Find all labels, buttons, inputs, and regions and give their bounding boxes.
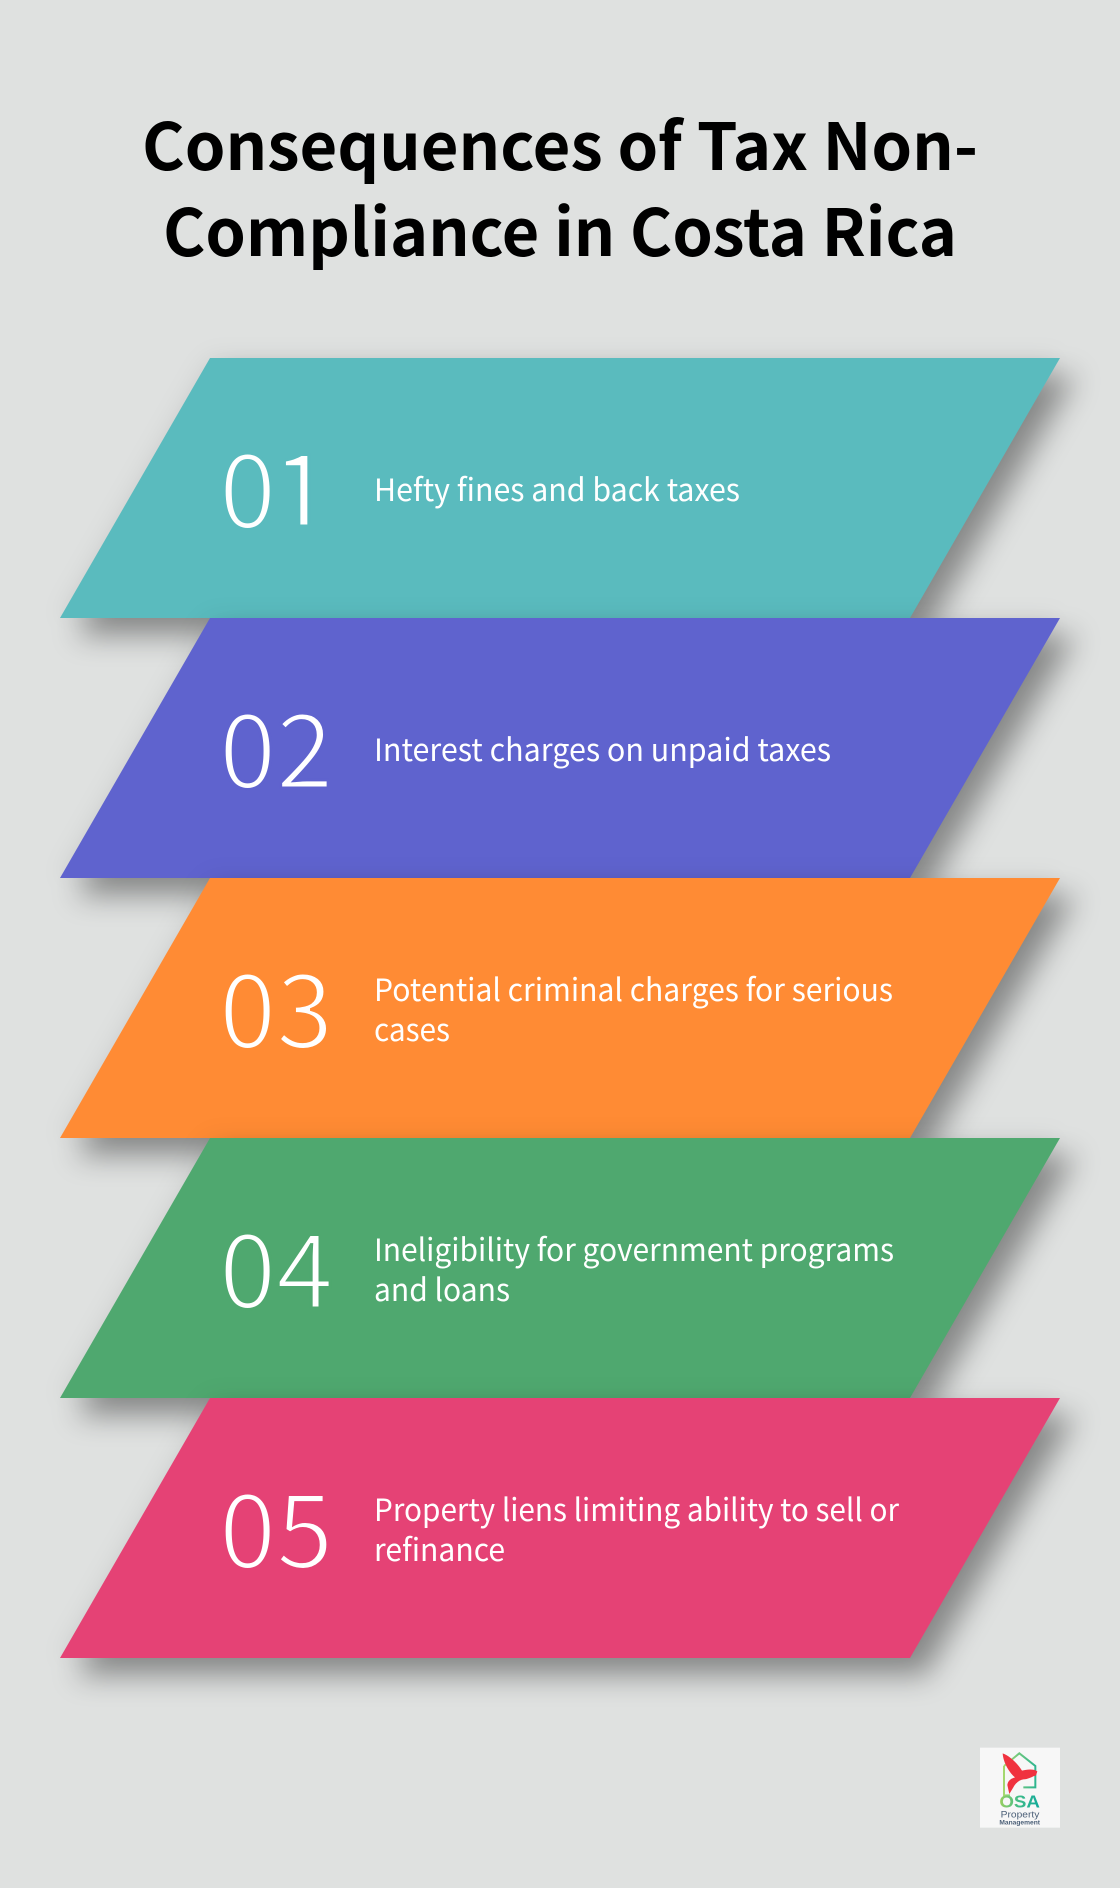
panel: item 04: Ineligibility for government programs (374, 1225, 894, 1270)
panel: item 01: Hefty fines and back taxes (374, 465, 740, 510)
title (142, 95, 978, 275)
panel: item 01: 0 (219, 409, 276, 558)
panel: item 04 (60, 1138, 1060, 1398)
panel: item 05: refinance (374, 1525, 505, 1570)
title: Consequences of Tax Non- (142, 95, 978, 189)
panel: item 05: Property liens limiting ability to sell or (374, 1485, 900, 1530)
panel: item 02: Interest charges on unpaid taxes (374, 725, 831, 770)
panel: item 02 (60, 618, 1060, 878)
logo: OSA Property Management: OSA (999, 1791, 1040, 1811)
panel: item 03: 03 (219, 929, 333, 1078)
panel: item 03: cases (374, 1005, 450, 1050)
panel: item 05 (60, 1398, 1060, 1658)
logo: OSA Property Management: Property (1001, 1810, 1040, 1820)
logo: OSA Property Management: Management (999, 1821, 1040, 1827)
panel: item 01: 1 (271, 405, 332, 565)
panel: item 02: 02 (219, 669, 333, 818)
title: Compliance in Costa Rica (163, 181, 957, 275)
panel: item 05: 05 (219, 1449, 333, 1598)
panel: item 01 (60, 358, 1060, 618)
logo: OSA Property Management (980, 1748, 1060, 1828)
panel: item 04: 04 (219, 1189, 333, 1338)
panel: item 03: Potential criminal charges for serious (374, 965, 893, 1010)
panel: item 03 (60, 878, 1060, 1138)
panel: item 04: and loans (374, 1265, 510, 1310)
